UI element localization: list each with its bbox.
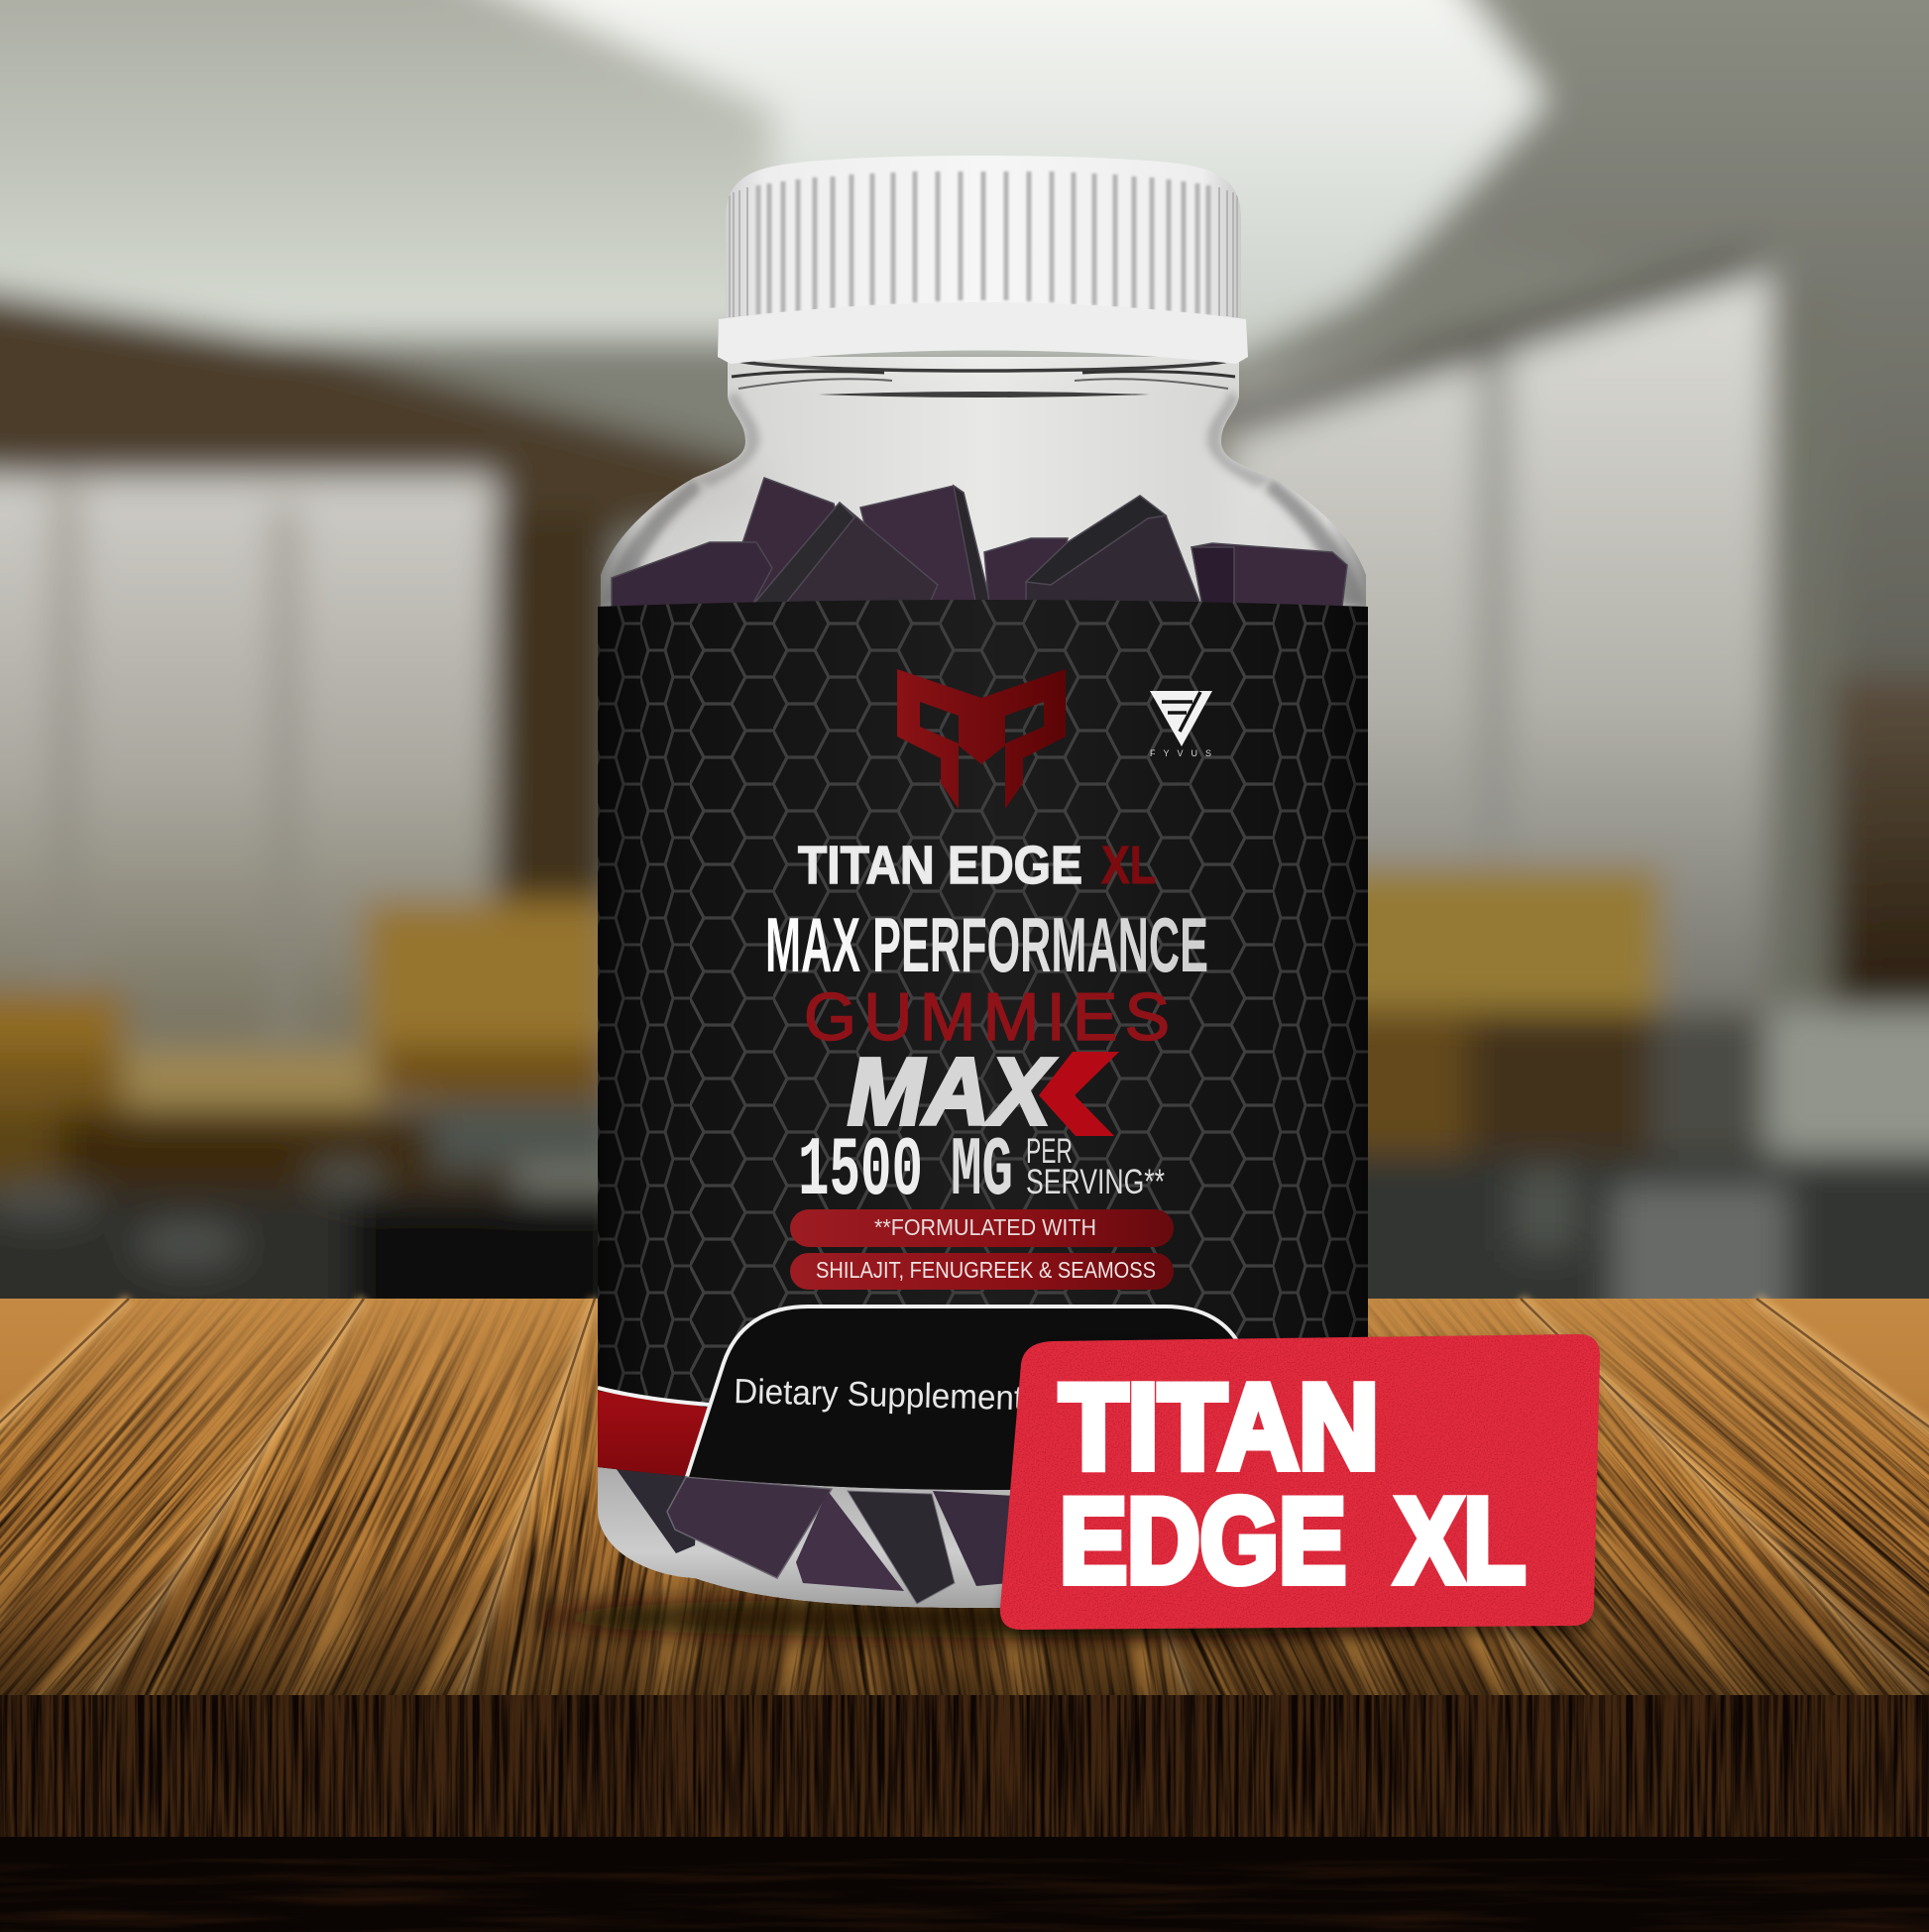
brand logo	[897, 669, 1066, 809]
product name: TITAN EDGE	[798, 836, 1082, 895]
dosage: 1500	[798, 1125, 923, 1219]
bottle label	[595, 591, 1373, 1546]
bottle shadow on table	[525, 1598, 1457, 1638]
red band	[598, 1388, 710, 1483]
wooden table	[0, 1299, 1929, 1932]
pill: formulated with: **FORMULATED WITH	[874, 1214, 1096, 1240]
card title: TITAN	[1060, 1359, 1379, 1494]
soft focus fade at table back	[0, 1299, 1929, 1507]
product name: XL	[1101, 836, 1156, 895]
table underside shadow	[0, 1837, 1929, 1932]
red product name card	[991, 1328, 1606, 1640]
gummies heading: GUMMIES	[804, 979, 1170, 1055]
card felt texture	[991, 1328, 1606, 1636]
table surface base	[0, 1299, 1929, 1695]
gummies above label	[612, 478, 1347, 607]
glass neck reflections	[601, 347, 1366, 605]
table front face	[0, 1695, 1929, 1837]
cap dome and ridges	[724, 154, 1244, 328]
dosage	[798, 1125, 1165, 1219]
blurred room background	[0, 0, 1929, 1358]
FYVUS logo	[1150, 691, 1212, 758]
gummies below label	[614, 1465, 1031, 1604]
pill: formulated with	[790, 1209, 1174, 1247]
dosage: SERVING**	[1026, 1163, 1165, 1201]
dosage: PER	[1026, 1132, 1073, 1171]
cap lower band	[718, 302, 1248, 364]
FYVUS logo: FYVUS	[1150, 748, 1211, 758]
card title: XL	[1396, 1473, 1526, 1608]
card body	[1000, 1334, 1600, 1630]
pill: ingredients	[790, 1253, 1174, 1290]
MAX emblem: MAX	[848, 1039, 1056, 1145]
black lower panel	[685, 1305, 1238, 1490]
plank grain	[0, 1299, 1929, 1695]
pill: ingredients: SHILAJIT, FENUGREEK & SEAMOSS	[816, 1257, 1156, 1283]
dosage: MG	[951, 1125, 1013, 1219]
card title: EDGE	[1060, 1473, 1346, 1608]
plank bevels	[0, 1299, 1929, 1695]
label artwork	[734, 669, 1212, 1418]
bottle cap	[718, 154, 1248, 364]
glass body	[595, 347, 1373, 1616]
card shadow	[999, 1340, 1592, 1640]
dietary supplement text: Dietary Supplement	[734, 1372, 1024, 1418]
supplement bottle	[595, 154, 1373, 1616]
card title	[1060, 1359, 1526, 1608]
max performance heading: MAX PERFORMANCE	[765, 901, 1208, 988]
